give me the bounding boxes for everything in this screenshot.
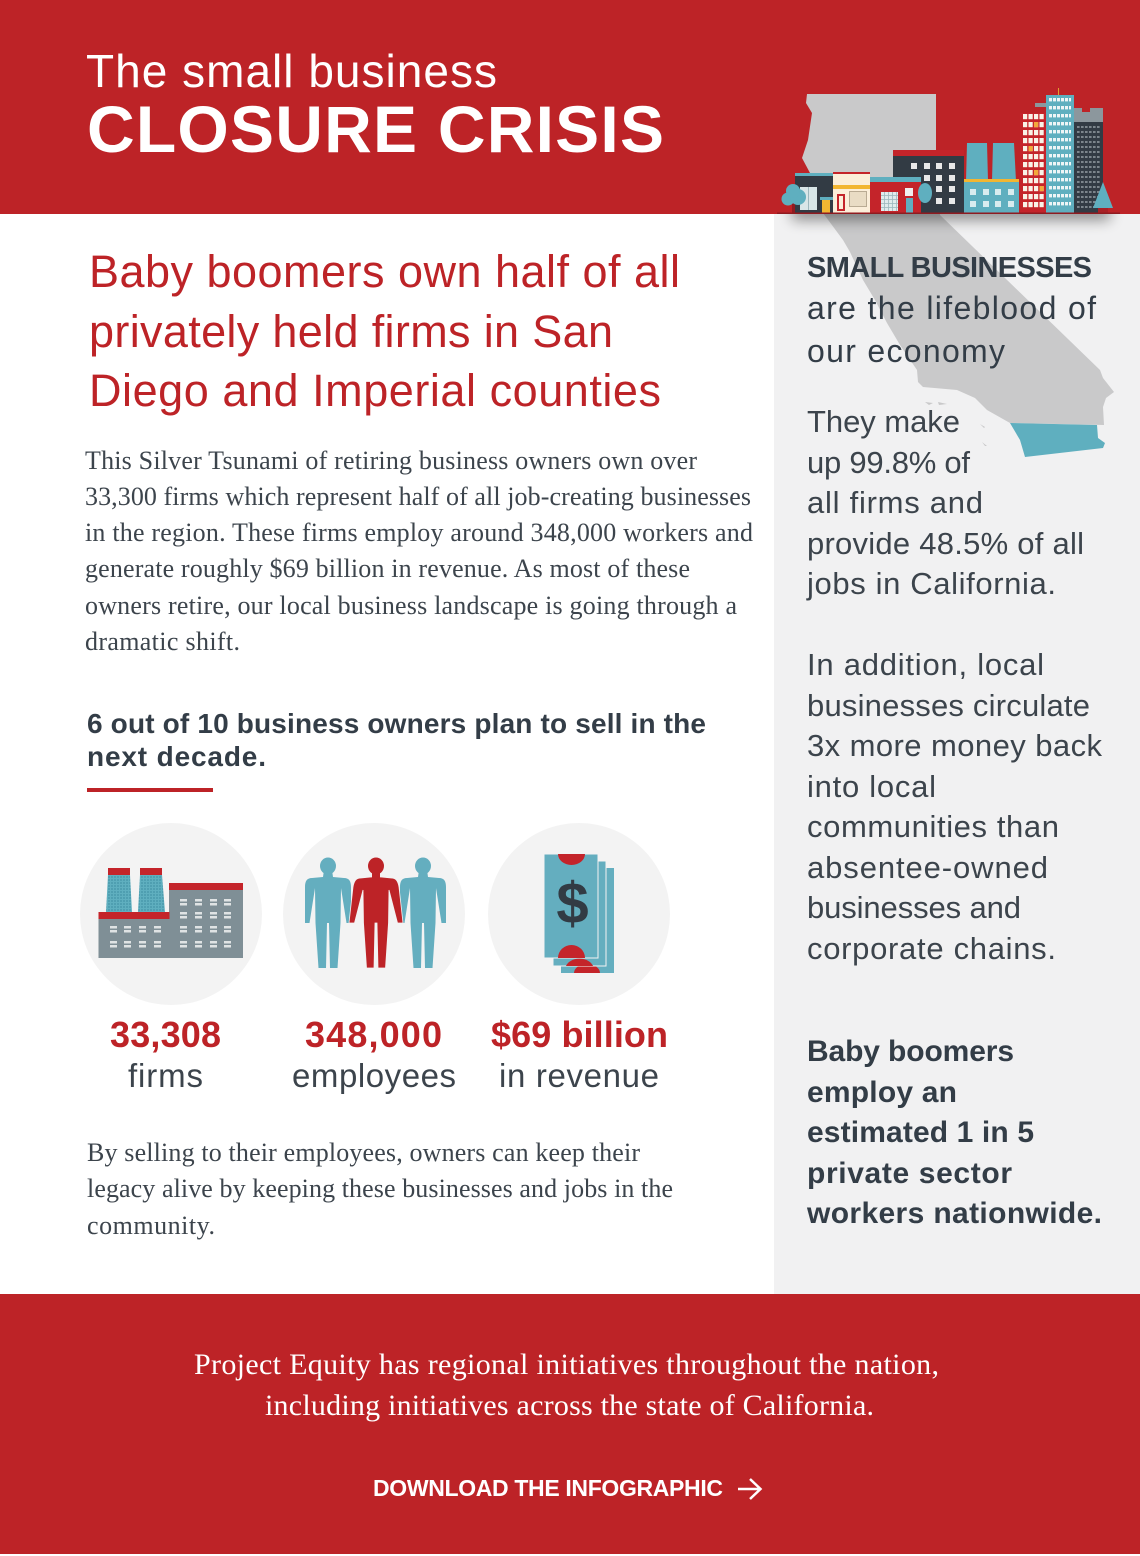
skyline: red tower [1020, 113, 1046, 213]
skyline: cream shop [833, 172, 870, 213]
sidebar: boomers employ callout: workers nationwide. [806, 1197, 1102, 1230]
subheading: 6 out of 10: 6 out of 10 business owners plan to sell in the [87, 708, 706, 739]
skyline: teal tower [1035, 88, 1074, 213]
panel: footer band [0, 1294, 1140, 1554]
sidebar: money circulation: businesses and [807, 890, 1021, 925]
skyline: factory [963, 143, 1019, 213]
text block: selling to employees: community. [87, 1211, 215, 1240]
icon: money: $ [556, 871, 589, 936]
panel: sidebar background [774, 214, 1140, 1294]
panel: header band [0, 0, 1140, 214]
text block: Silver Tsunami: in the region. These firms employ around 348,000 workers and [85, 518, 753, 547]
map: California [802, 94, 1114, 457]
skyline: trees [782, 182, 1113, 213]
sidebar: boomers employ callout: private sector [807, 1157, 1012, 1190]
text block: Silver Tsunami: generate roughly $69 billion in revenue. As most of these [85, 554, 690, 583]
sidebar: firms and jobs share: jobs in California. [806, 566, 1056, 601]
sidebar: firms and jobs share [806, 404, 1084, 601]
sidebar: firms and jobs share: all firms and [807, 485, 983, 520]
sidebar: firms and jobs share: up 99.8% of [807, 445, 970, 480]
subheading: 6 out of 10: next decade. [87, 741, 266, 772]
sidebar: money circulation: 3x more money back [807, 728, 1102, 763]
sidebar: boomers employ callout: Baby boomers [807, 1035, 1014, 1068]
title: The small business [86, 45, 497, 97]
stat: employees [292, 1014, 456, 1094]
text block: Silver Tsunami: dramatic shift. [85, 627, 240, 656]
text block: Silver Tsunami: This Silver Tsunami of retiring business owners own over [85, 446, 697, 475]
skyline: ground line [777, 212, 1120, 214]
text block: selling to employees: By selling to their employees, owners can keep their [87, 1138, 640, 1167]
text block: selling to employees: legacy alive by keeping these businesses and jobs in the [87, 1174, 673, 1203]
text block: Silver Tsunami: 33,300 firms which represent half of all job-creating businesses [85, 482, 751, 511]
sidebar: boomers employ callout: estimated 1 in 5 [807, 1116, 1034, 1149]
footer text [194, 1348, 939, 1422]
sidebar: money circulation: communities than [807, 809, 1059, 844]
title: CLOSURE CRISIS [87, 92, 664, 166]
illustration: city skyline [777, 88, 1120, 214]
red accent rule [87, 788, 213, 792]
footer text: including initiatives across the state of California. [265, 1389, 874, 1422]
sidebar: boomers employ callout: employ an [807, 1076, 957, 1109]
stat: firms [110, 1014, 221, 1094]
stat: employees: 348,000 [305, 1014, 442, 1055]
skyline: dark tower [1074, 108, 1103, 213]
map: San Diego and Imperial counties [1010, 423, 1105, 457]
sidebar: lifeblood heading: SMALL BUSINESSES [807, 252, 1092, 284]
text block: Silver Tsunami: owners retire, our local business landscape is going through a [85, 591, 737, 620]
stat: firms: firms [128, 1057, 203, 1094]
skyline: dark office block [893, 150, 964, 213]
skyline: red shop [870, 177, 921, 213]
stat: employees: employees [292, 1057, 456, 1094]
footer link: DOWNLOAD THE INFOGRAPHIC [373, 1475, 723, 1501]
shadow under skyline [792, 202, 1110, 220]
map: islands [925, 402, 987, 446]
icon: employees [283, 823, 465, 1005]
stat: firms: 33,308 [110, 1014, 221, 1055]
sidebar: money circulation [807, 647, 1102, 966]
heading: baby boomers: Baby boomers own half of all [89, 246, 680, 297]
heading: baby boomers: privately held firms in San [89, 306, 613, 357]
icon: arrow [738, 1479, 760, 1499]
sidebar: money circulation: businesses circulate [807, 688, 1090, 723]
sidebar: money circulation: In addition, local [807, 647, 1044, 682]
skyline: dark shop [795, 173, 833, 213]
footer text: Project Equity has regional initiatives throughout the nation, [194, 1348, 939, 1381]
sidebar: money circulation: corporate chains. [807, 931, 1056, 966]
icon: factory [80, 823, 262, 1005]
sidebar: boomers employ callout [806, 1035, 1102, 1230]
stat: revenue: in revenue [499, 1057, 659, 1094]
sidebar: lifeblood heading: our economy [807, 333, 1005, 369]
icon: money [488, 823, 670, 1005]
sidebar: lifeblood heading: are the lifeblood of [807, 290, 1096, 326]
sidebar: lifeblood heading [807, 252, 1096, 369]
sidebar: firms and jobs share: provide 48.5% of all [807, 526, 1084, 561]
title [86, 45, 664, 166]
text block: Silver Tsunami [85, 446, 753, 656]
sidebar: firms and jobs share: They make [807, 404, 960, 439]
sidebar: money circulation: absentee-owned [807, 850, 1048, 885]
stat: revenue [491, 1014, 668, 1094]
text block: selling to employees [87, 1138, 673, 1240]
sidebar: money circulation: into local [807, 769, 936, 804]
heading: baby boomers: Diego and Imperial counties [89, 365, 661, 416]
heading: baby boomers [89, 246, 680, 416]
subheading: 6 out of 10 [87, 708, 706, 772]
stat: revenue: $69 billion [491, 1014, 668, 1055]
